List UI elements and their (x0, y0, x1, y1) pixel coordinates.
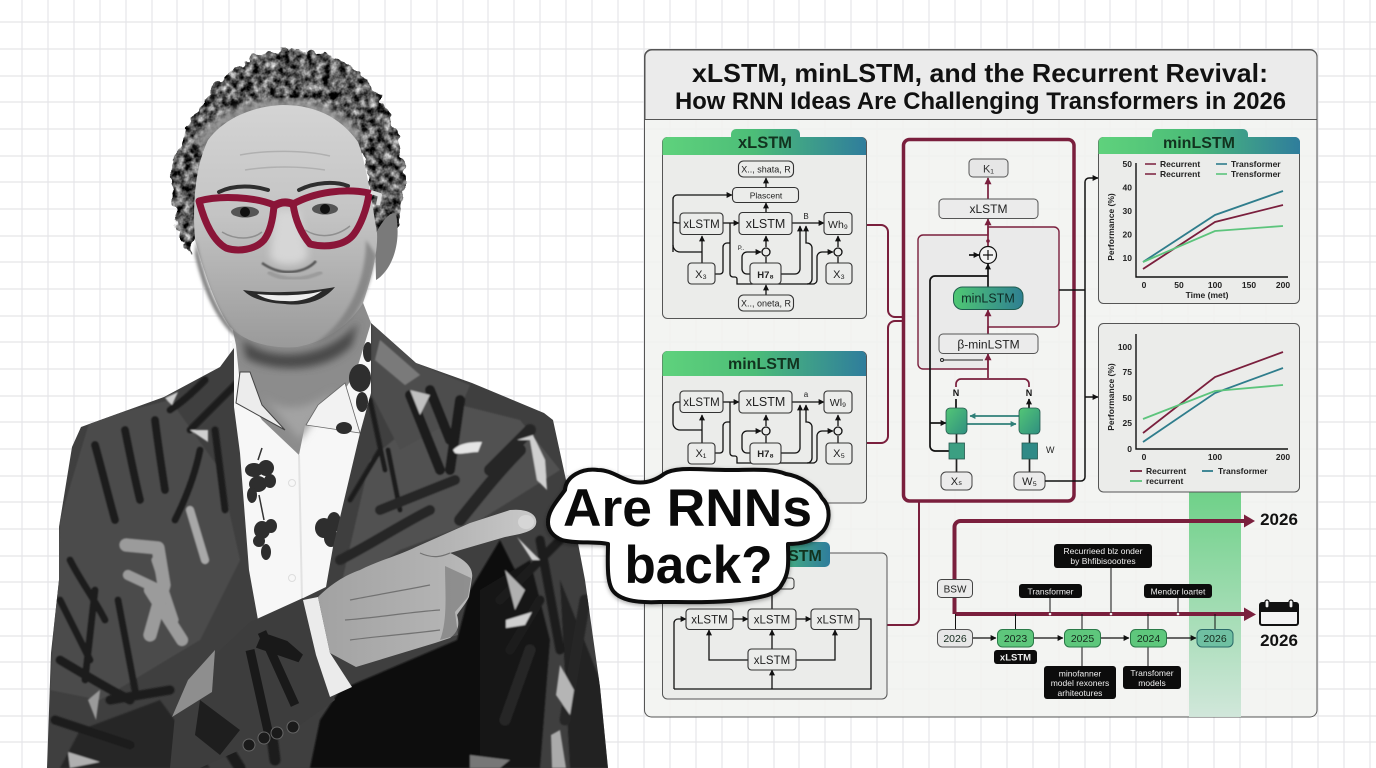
card diagram labels: X.., shata, R (741, 164, 791, 174)
calendar icon (1260, 600, 1298, 625)
legend: Recurrent (1146, 466, 1186, 476)
card diagram labels: xLSTM (746, 395, 785, 409)
box beta-minLSTM (939, 334, 1038, 354)
card diagram labels: X₃ (695, 269, 707, 281)
dark callouts: Mendor loartet (1151, 586, 1206, 596)
tick labels: 20 (1123, 230, 1132, 240)
dark callouts: by Bhfibisoootres (1070, 556, 1136, 566)
stems (956, 568, 1215, 666)
legend (1145, 159, 1281, 179)
arrows to charts (1045, 178, 1098, 481)
year nodes: 2025 (1071, 633, 1094, 645)
card diagram labels: X.., oneta, R (741, 298, 792, 308)
card: xLSTM: xLSTM (738, 134, 792, 152)
glasses (199, 191, 380, 250)
card diagram labels: xLSTM (683, 397, 720, 409)
tick labels: 50 (1123, 159, 1132, 169)
tick labels (1106, 159, 1290, 300)
forehead creases (240, 151, 330, 170)
input boxes (941, 472, 1045, 490)
tick labels: 50 (1123, 393, 1132, 403)
mouth (243, 287, 335, 305)
green cells (946, 408, 1040, 459)
nose (262, 210, 322, 279)
dark callouts (994, 544, 1212, 699)
bubble text: Are RNNs (563, 479, 812, 538)
card diagram lines (674, 589, 871, 689)
card diagram labels: H7₈ (757, 270, 774, 281)
data lines (1143, 191, 1283, 269)
speech bubble (548, 469, 829, 602)
tick labels: 100 (1208, 452, 1222, 462)
inner block (918, 227, 1059, 369)
tick labels: Performance (%) (1106, 363, 1116, 431)
card diagram labels: H7₈ (757, 449, 774, 460)
bubble text (563, 479, 812, 595)
dark callouts: Recurrieed blz onder (1064, 546, 1143, 556)
ear (375, 213, 398, 280)
card diagram labels: X₃ (833, 269, 845, 281)
card diagram labels: a (804, 390, 809, 399)
year nodes: 2024 (1137, 633, 1160, 645)
jacket pattern (50, 323, 608, 768)
hair (173, 50, 405, 252)
jacket dark strokes (55, 380, 585, 768)
legend (1130, 466, 1268, 486)
year nodes: 2023 (1004, 633, 1027, 645)
tick labels (1106, 342, 1290, 462)
eyes (231, 204, 338, 218)
card: third LSTM: STM (788, 548, 822, 565)
panel: central architecture (904, 140, 1074, 501)
person: presenter pointing (40, 50, 620, 768)
jacket mid-tone areas (50, 323, 560, 700)
card diagram labels: X₁ (695, 448, 707, 460)
tick labels: 0 (1127, 444, 1132, 454)
input boxes: W₅ (1022, 476, 1037, 488)
card diagram labels (683, 390, 846, 460)
data lines (1143, 352, 1283, 442)
card diagram labels: xLSTM (817, 614, 853, 626)
shirt cuff (303, 597, 352, 697)
tick labels: 30 (1123, 206, 1132, 216)
connector lines from left cards (866, 225, 919, 625)
dark callouts: model rexoners (1051, 678, 1109, 688)
card diagram labels: xLSTM (683, 219, 720, 231)
card: third LSTM (662, 542, 887, 699)
upper timeline arrow (954, 514, 1255, 614)
card diagram labels: Wl₉ (830, 397, 846, 409)
dark callouts: Transformer (1028, 586, 1074, 596)
tick labels: 0 (1142, 280, 1147, 290)
tick labels: 100 (1118, 342, 1132, 352)
card diagram labels: P.. (738, 246, 745, 252)
card diagram labels: xLSTM (754, 655, 790, 667)
timeline highlight band (1189, 492, 1241, 717)
eyebrows (219, 183, 348, 192)
tick labels: 200 (1276, 280, 1290, 290)
panel: central architecture: N (1026, 388, 1032, 398)
face (194, 105, 377, 347)
plus node (980, 246, 996, 264)
card diagram labels (683, 164, 848, 308)
panel: central architecture: W (1046, 445, 1055, 455)
tick labels: Time (met) (1186, 290, 1229, 300)
bubble text: back? (624, 536, 772, 595)
tick labels: 150 (1242, 280, 1256, 290)
card diagram labels: xLSTM (754, 614, 790, 626)
tick labels: 200 (1276, 452, 1290, 462)
panel: central architecture: β-minLSTM (957, 338, 1020, 352)
tick labels: 100 (1208, 280, 1222, 290)
input boxes: Xₛ (951, 476, 962, 488)
axes (1136, 334, 1288, 449)
tick labels: Performance (%) (1106, 193, 1116, 261)
chart: performance comparison (1098, 324, 1300, 492)
panel: central architecture: minLSTM (961, 292, 1015, 306)
axes (1136, 163, 1288, 277)
pointing hand (318, 510, 536, 667)
jacket light strokes (126, 510, 205, 640)
BSW box (938, 580, 972, 598)
card diagram boxes (680, 391, 852, 464)
year nodes: 2026 (1203, 633, 1227, 645)
dark callouts: models (1138, 678, 1166, 688)
legend: Transformer (1218, 466, 1268, 476)
N labels: N (953, 388, 959, 398)
legend: Transformer (1231, 159, 1281, 169)
jacket highlights (68, 340, 574, 768)
card diagram boxes (680, 161, 852, 311)
box xLSTM (939, 199, 1038, 218)
timeline: BSW (944, 584, 967, 596)
timeline dots (1049, 613, 1179, 615)
card: minLSTM: minLSTM (728, 356, 800, 373)
title block: How RNN Ideas Are Challenging Transformers in 2026 (675, 88, 1286, 115)
jacket (40, 320, 620, 768)
legend: Trensformer (1231, 169, 1281, 179)
shirt flowers (245, 342, 373, 560)
year nodes: 2026 (943, 633, 967, 645)
card diagram labels: Plascent (750, 190, 783, 200)
timeline (938, 510, 1298, 699)
connection lines (930, 178, 1030, 472)
legend: recurrent (1146, 476, 1183, 486)
tick labels: 10 (1123, 253, 1132, 263)
tick labels: 75 (1123, 367, 1132, 377)
title block: xLSTM, minLSTM, and the Recurrent Revival: (692, 58, 1268, 88)
forearm sleeve (170, 598, 335, 768)
panel: central architecture: xLSTM (969, 202, 1008, 216)
card diagram labels: xLSTM (746, 217, 785, 231)
tick labels: 40 (1123, 182, 1132, 192)
chart: performance over time (1098, 129, 1300, 304)
card diagram labels (691, 614, 853, 667)
card diagram labels: X₅ (833, 448, 845, 460)
eye creases (222, 226, 350, 238)
card diagram lines (673, 402, 842, 463)
legend: Recurrent (1160, 159, 1200, 169)
panel: central architecture: K₁ (983, 164, 994, 176)
dark callouts: minofanner (1059, 668, 1101, 678)
jacket dark areas (60, 540, 608, 768)
pill minLSTM (954, 287, 1023, 310)
card diagram labels: Wh₉ (828, 219, 848, 231)
card diagram labels: B (803, 212, 809, 221)
year label upper: 2026 (1260, 510, 1298, 529)
card diagram lines (673, 178, 842, 295)
neck and shirt (222, 280, 375, 625)
dark callouts: xLSTM (1000, 652, 1031, 664)
dark callouts: Transfomer (1130, 668, 1174, 678)
dark callouts: arhiteotures (1058, 688, 1102, 698)
panel: infographic (644, 50, 1317, 717)
card diagram boxes (686, 609, 859, 670)
year label lower: 2026 (1260, 631, 1298, 650)
sleeve buttons (243, 721, 299, 751)
card: xLSTM (662, 129, 866, 318)
tick labels: 25 (1123, 418, 1132, 428)
legend: Recurrent (1160, 169, 1200, 179)
lower timeline arrow (955, 608, 1256, 621)
card: minLSTM (662, 351, 866, 503)
timeline arrows (973, 637, 1196, 639)
box K1 (969, 159, 1008, 177)
chart: performance over time: minLSTM (1163, 135, 1235, 152)
tick labels: 0 (1142, 452, 1147, 462)
tick labels: 50 (1174, 280, 1184, 290)
small box (770, 578, 794, 589)
year nodes (938, 630, 1233, 647)
title block (645, 50, 1317, 120)
card diagram labels: xLSTM (691, 614, 728, 626)
